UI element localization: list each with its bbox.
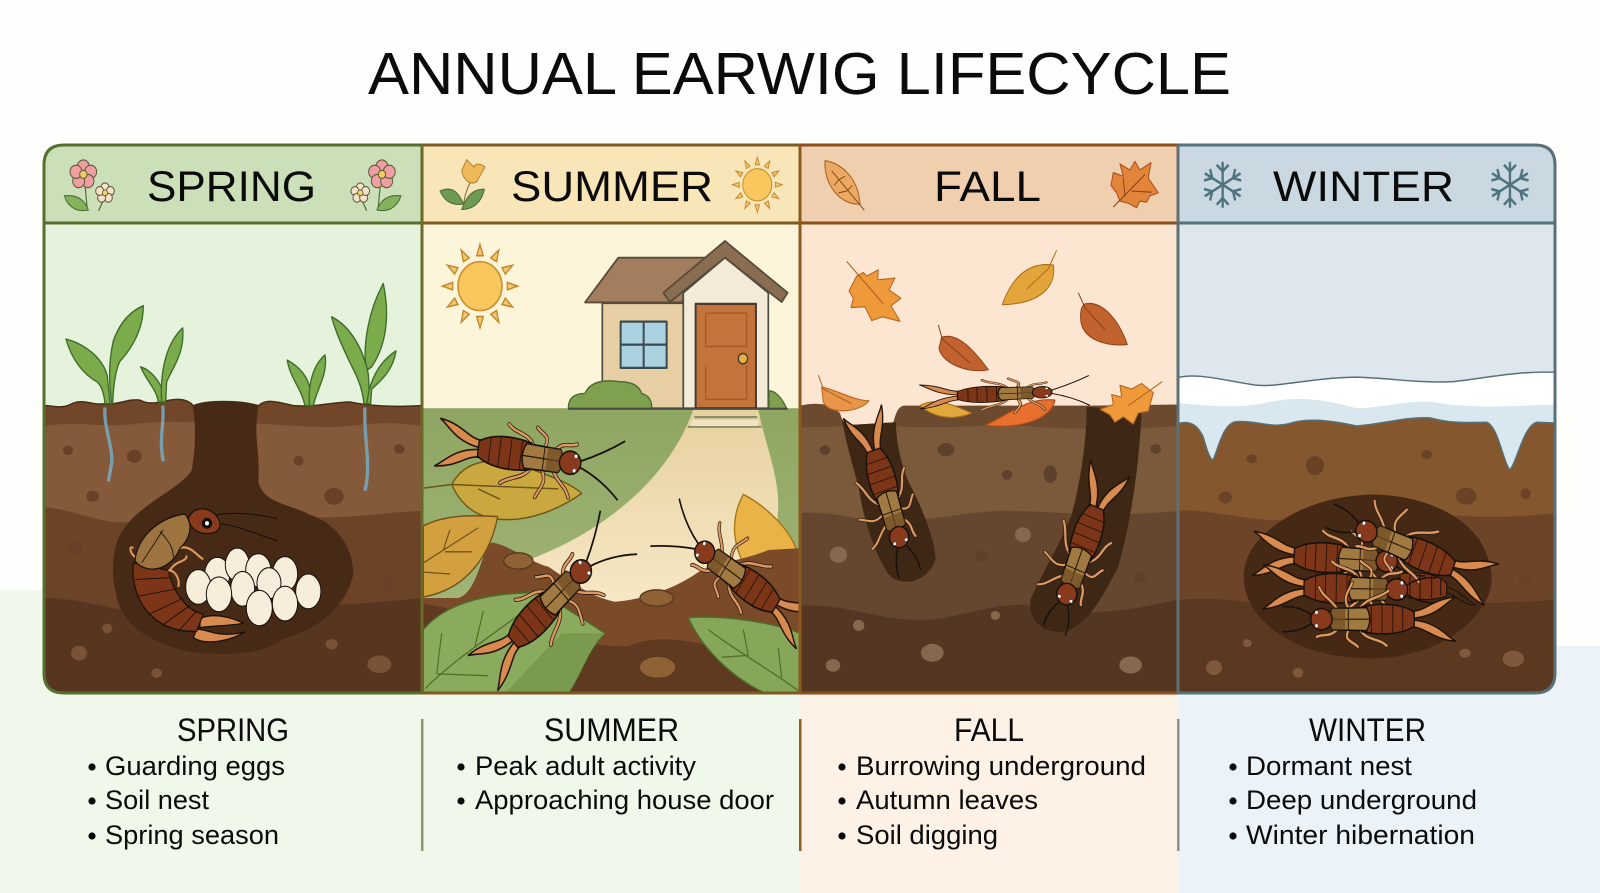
panel frame — [44, 145, 1555, 693]
caption: spring: Soil nest — [105, 785, 209, 815]
panel: summer — [422, 145, 827, 702]
panel: winter — [1177, 145, 1557, 694]
header labels: WINTER — [1273, 163, 1454, 211]
earwig near soil — [650, 498, 798, 650]
sun — [442, 244, 518, 328]
icon: header sun — [732, 157, 782, 212]
eggs — [186, 548, 321, 626]
icon: snowflake right — [1489, 162, 1531, 208]
caption: spring: SPRING — [177, 712, 289, 748]
header labels: FALL — [934, 163, 1041, 211]
earwig on leaves — [919, 375, 1090, 417]
caption: spring — [88, 712, 289, 850]
earwig guarding eggs — [130, 509, 277, 642]
icon: leaf — [825, 161, 864, 210]
hibernating earwig cluster — [1252, 498, 1499, 649]
caption: winter: Dormant nest — [1246, 751, 1412, 781]
earwig burrowing left — [842, 404, 921, 578]
caption: fall — [838, 712, 1146, 850]
earwig burrowing right — [1036, 460, 1130, 636]
divider spring-summer — [421, 719, 424, 851]
caption: summer — [457, 712, 774, 815]
caption: fall: Autumn leaves — [856, 785, 1038, 815]
icon: maple leaf — [1111, 161, 1158, 208]
burrow nest — [113, 401, 353, 654]
caption: fall: Soil digging — [856, 820, 998, 850]
caption: spring: Spring season — [105, 820, 279, 850]
winter scene — [1177, 162, 1557, 694]
icons: spring flowers — [64, 160, 401, 211]
green leaves — [423, 592, 800, 693]
caption: summer: Peak adult activity — [475, 751, 697, 781]
spring scene — [45, 160, 422, 694]
soil layers — [45, 399, 422, 694]
soil layers — [1177, 418, 1557, 694]
panel: spring — [44, 145, 422, 694]
divider fall-winter — [1177, 719, 1180, 851]
lawn and path — [424, 408, 798, 602]
soil layers — [800, 404, 1177, 693]
earwig on yellow leaf — [434, 417, 626, 501]
nest — [1244, 494, 1492, 658]
earwig on green leaf — [464, 511, 643, 702]
falling leaves — [818, 250, 1162, 426]
plants and roots — [66, 284, 396, 491]
divider summer-fall — [799, 719, 802, 851]
caption: winter — [1229, 712, 1477, 850]
caption: spring: Guarding eggs — [105, 751, 285, 781]
burrows — [842, 407, 1142, 632]
icon: snowflake left — [1202, 162, 1244, 208]
caption: winter: Deep underground — [1246, 785, 1477, 815]
soil mound — [423, 543, 800, 693]
panel: fall — [800, 145, 1178, 693]
caption: fall: Burrowing underground — [856, 751, 1146, 781]
header labels — [147, 163, 1454, 211]
caption: summer: SUMMER — [544, 712, 679, 748]
header labels: SUMMER — [511, 163, 713, 211]
icon: tulip — [440, 160, 485, 210]
snow layer — [1180, 371, 1554, 408]
caption: summer: Approaching house door — [475, 785, 774, 815]
header labels: SPRING — [147, 163, 316, 211]
fall scene — [800, 161, 1177, 693]
yellow and orange leaves — [423, 461, 797, 597]
summer scene — [422, 157, 827, 702]
title: ANNUAL EARWIG LIFECYCLE — [368, 41, 1231, 107]
house — [568, 241, 788, 409]
caption: fall: FALL — [954, 712, 1024, 748]
caption: winter: WINTER — [1309, 712, 1426, 748]
caption: winter: Winter hibernation — [1246, 820, 1475, 850]
